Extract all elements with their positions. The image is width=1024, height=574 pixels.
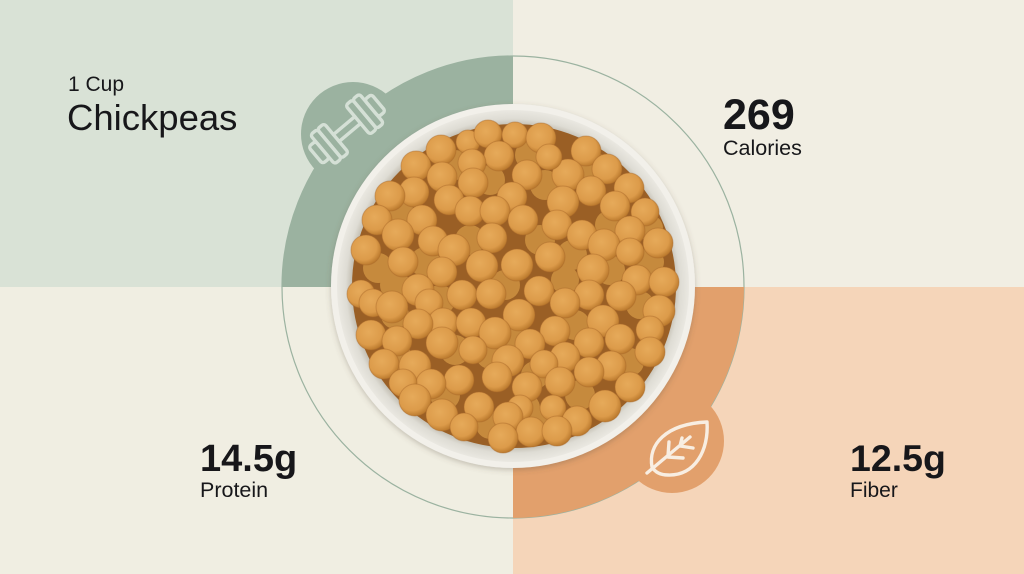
bowl interior shadow <box>352 124 676 448</box>
sector: green with icon bump <box>282 56 513 287</box>
icon: leaf <box>647 422 707 475</box>
bowl rim <box>331 104 695 468</box>
panel: bottom-left cream quadrant <box>0 287 513 574</box>
sector: orange with icon bump <box>513 287 744 518</box>
title: 1 Cup Chickpeas: 1 Cup <box>68 73 124 96</box>
ring: thin circular outline <box>282 56 744 518</box>
stat: protein <box>200 438 297 502</box>
background chickpeas <box>363 140 664 439</box>
bowl of chickpeas <box>331 104 695 468</box>
panel: top-left green quadrant <box>0 0 513 287</box>
stat: calories <box>723 91 802 160</box>
stat: protein: Protein <box>200 478 268 502</box>
panel: bottom-right peach quadrant <box>513 287 1024 574</box>
stat: calories: 269 <box>723 91 795 139</box>
stat: fiber <box>850 437 946 502</box>
stat: calories: Calories <box>723 136 802 160</box>
title: 1 Cup Chickpeas: Chickpeas <box>67 97 237 138</box>
stat: fiber: Fiber <box>850 479 898 502</box>
stat: protein: 14.5g <box>200 438 297 480</box>
title: 1 Cup Chickpeas <box>67 73 237 138</box>
icon: dumbbell <box>303 88 391 170</box>
panel: top-right cream quadrant <box>513 0 1024 287</box>
bowl inner wall <box>337 110 689 462</box>
top chickpeas <box>347 120 679 453</box>
stat: fiber: 12.5g <box>850 437 946 479</box>
